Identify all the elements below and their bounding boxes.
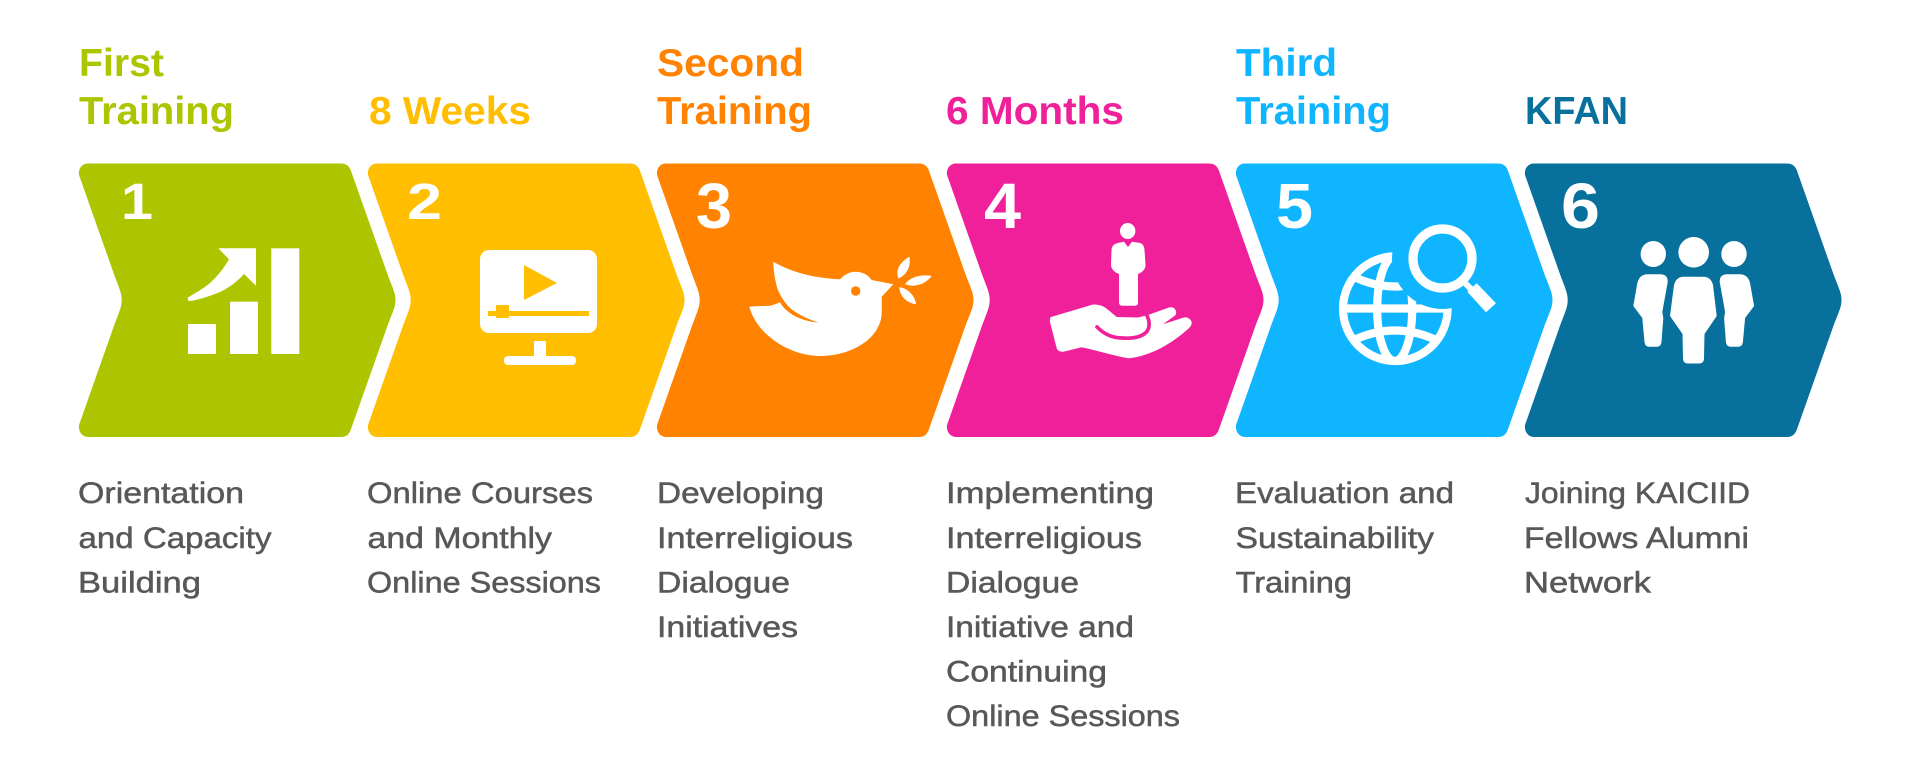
text block: step 3 description — [657, 477, 853, 644]
icon: dove with olive branch — [749, 257, 932, 356]
text block: step 2 description: Online Sessions — [367, 566, 601, 600]
text block: step 2 description: and Monthly — [368, 522, 552, 555]
text block: step 4 description: Initiative and — [946, 611, 1134, 644]
text block: step 1 description: Orientation — [78, 477, 244, 510]
text block: step 4 description: Dialogue — [946, 566, 1079, 600]
step 1 heading: First Training — [79, 42, 234, 133]
panel: step 2 chevron — [368, 164, 684, 437]
text block: step 1 description: Building — [78, 566, 201, 600]
text block: step 2 description: Online Courses — [367, 477, 593, 510]
step 6 heading: KFAN: KFAN — [1525, 90, 1628, 133]
number 5: 5 — [1276, 170, 1313, 242]
text block: step 4 description: Interreligious — [946, 522, 1142, 555]
step 3 heading: Second Training: Second — [657, 42, 804, 85]
step 2 heading: 8 Weeks: 8 Weeks — [369, 90, 531, 133]
text block: step 4 description: Implementing — [946, 477, 1154, 510]
number 1: 1 — [121, 173, 153, 230]
number 2: 2 — [407, 173, 442, 230]
icon: globe with magnifying glass — [1343, 208, 1496, 361]
step 5 heading: Third Training: Training — [1236, 90, 1391, 133]
panel: step 3 chevron — [657, 164, 974, 437]
number 6: 6 — [1561, 170, 1600, 242]
panel: step 6 chevron — [1525, 164, 1842, 437]
panel: step 5 chevron — [1236, 164, 1552, 437]
step 4 heading: 6 Months: 6 Months — [946, 90, 1124, 133]
text block: step 5 description: Sustainability — [1236, 522, 1434, 555]
icon: group of three people — [1633, 237, 1754, 364]
text block: step 5 description: Training — [1236, 566, 1352, 600]
panel: step 1 chevron — [79, 164, 396, 437]
icon: video monitor — [480, 250, 597, 365]
icon: hand holding person — [1050, 223, 1192, 358]
text block: step 4 description — [946, 477, 1180, 733]
text block: step 5 description — [1235, 477, 1454, 600]
number 3: 3 — [696, 170, 732, 242]
step 3 heading: Second Training — [657, 42, 812, 133]
text block: step 6 description: Joining KAICIID — [1525, 477, 1750, 510]
step 5 heading: Third Training — [1236, 42, 1391, 133]
icon: rising bar chart with arrow — [188, 248, 299, 354]
text block: step 4 description: Online Sessions — [946, 700, 1180, 733]
text block: step 6 description: Network — [1524, 566, 1652, 600]
text block: step 3 description: Initiatives — [657, 611, 798, 644]
text block: step 2 description — [367, 477, 601, 600]
text block: step 5 description: Evaluation and — [1235, 477, 1454, 510]
number 4: 4 — [984, 170, 1021, 242]
text block: step 3 description: Dialogue — [657, 566, 790, 600]
panel: step 4 chevron — [947, 164, 1264, 437]
text block: step 6 description — [1524, 477, 1750, 600]
text block: step 1 description — [78, 477, 272, 600]
text block: step 6 description: Fellows Alumni — [1524, 522, 1749, 555]
text block: step 3 description: Developing — [657, 477, 824, 510]
step 5 heading: Third Training: Third — [1236, 42, 1337, 85]
text block: step 3 description: Interreligious — [657, 522, 853, 555]
text block: step 4 description: Continuing — [946, 656, 1107, 688]
step 1 heading: First Training: Training — [79, 90, 234, 133]
step 1 heading: First Training: First — [79, 42, 164, 85]
text block: step 1 description: and Capacity — [78, 522, 272, 555]
step 3 heading: Second Training: Training — [657, 90, 812, 133]
